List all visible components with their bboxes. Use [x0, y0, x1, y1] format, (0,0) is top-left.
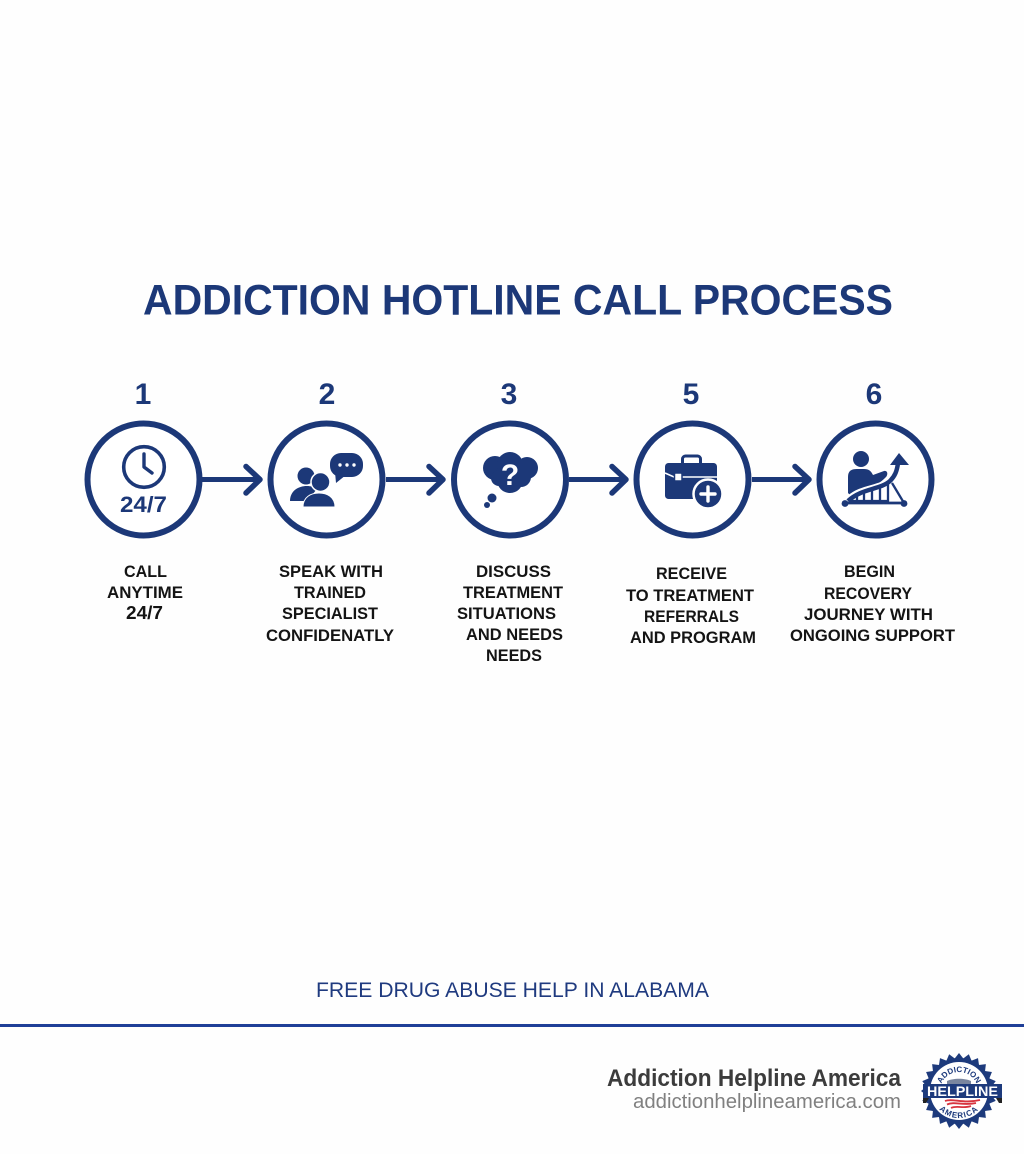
label: speak with trained specialist: SPECIALIST — [282, 605, 378, 623]
icon: 24/7 clock: 24/7 — [120, 492, 167, 517]
step number 1: 1 — [135, 378, 151, 411]
circle 5 — [636, 424, 748, 536]
icon: briefcase with plus — [665, 456, 722, 508]
label: discuss treatment situations and needs: TREATMENT — [463, 584, 563, 602]
label: receive treatment referrals and program: AND PROGRAM — [630, 629, 756, 647]
label: begin recovery journey with ongoing support: ONGOING SUPPORT — [790, 627, 955, 645]
label: call anytime 24/7: CALL — [124, 563, 167, 581]
label: discuss treatment situations and needs: AND NEEDS — [466, 626, 563, 644]
step 3: discuss situation — [454, 378, 566, 665]
label: discuss treatment situations and needs — [457, 563, 563, 665]
circle 6 — [820, 424, 932, 536]
footer: brand name: Addiction Helpline America — [607, 1065, 902, 1092]
label: discuss treatment situations and needs: DISCUSS — [476, 563, 551, 581]
label: speak with trained specialist: CONFIDENATLY — [266, 627, 394, 645]
label: receive treatment referrals and program: RECEIVE — [656, 565, 727, 583]
step 1: call anytime — [88, 378, 200, 623]
label: begin recovery journey with ongoing support: RECOVERY — [824, 585, 912, 603]
icon: thought cloud with question mark: ? — [501, 459, 519, 492]
label: call anytime 24/7: ANYTIME — [107, 584, 183, 602]
arrow: step 1 to step 2 — [202, 466, 260, 493]
label: discuss treatment situations and needs: NEEDS — [486, 647, 542, 665]
label: speak with trained specialist: SPEAK WITH — [279, 563, 383, 581]
arrow: step 3 to step 5 — [569, 466, 626, 493]
step 6: begin recovery — [790, 378, 955, 645]
step 5: receive referrals — [626, 378, 756, 647]
label: receive treatment referrals and program — [626, 565, 756, 647]
label: begin recovery journey with ongoing support — [790, 563, 955, 645]
step number 2: 2 — [319, 378, 335, 411]
footer: website: addictionhelplineamerica.com — [633, 1091, 901, 1113]
circle 2 — [270, 424, 382, 536]
circle 3 — [454, 424, 566, 536]
label: speak with trained specialist: TRAINED — [294, 584, 366, 602]
icon: people with speech bubble — [290, 453, 363, 507]
arrow: step 2 to step 3 — [386, 466, 443, 493]
logo: helpline badge: ADDICTION — [938, 1066, 982, 1084]
step number 5: 5 — [683, 378, 699, 411]
step number 6: 6 — [866, 378, 882, 411]
circle 1 — [88, 424, 200, 536]
arrow: step 5 to step 6 — [752, 466, 809, 493]
title: ADDICTION HOTLINE CALL PROCESS — [143, 276, 893, 324]
label: begin recovery journey with ongoing support: BEGIN — [844, 563, 895, 581]
label: begin recovery journey with ongoing support: JOURNEY WITH — [804, 606, 933, 624]
logo: helpline badge — [921, 1053, 1002, 1129]
label: discuss treatment situations and needs: SITUATIONS — [457, 605, 556, 623]
icon: 24/7 clock — [120, 447, 167, 517]
label: call anytime 24/7: 24/7 — [126, 603, 163, 623]
subtitle: FREE DRUG ABUSE HELP IN ALABAMA — [316, 979, 709, 1002]
step number 3: 3 — [501, 378, 517, 411]
icon: person with rising recovery arrow — [842, 451, 909, 507]
label: call anytime 24/7 — [107, 563, 183, 623]
logo: helpline badge: AMERICA — [939, 1106, 978, 1118]
label: receive treatment referrals and program: TO TREATMENT — [626, 587, 754, 605]
label: receive treatment referrals and program: REFERRALS — [644, 608, 739, 626]
icon: thought cloud with question mark — [483, 452, 538, 508]
logo: helpline badge: HELPLINE — [927, 1083, 998, 1099]
step 2: speak with specialist — [266, 378, 394, 645]
label: speak with trained specialist — [266, 563, 394, 645]
